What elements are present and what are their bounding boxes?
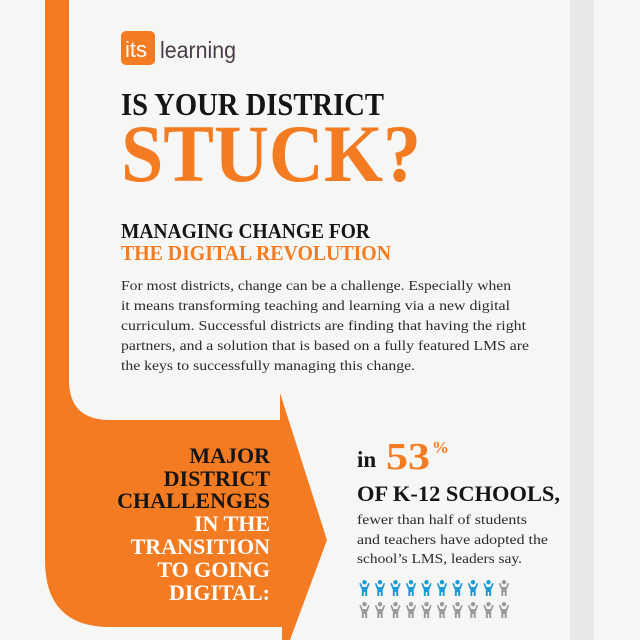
intro paragraph <box>121 279 529 374</box>
logo <box>121 31 236 65</box>
stat 53%: in <box>357 447 376 472</box>
arrow heading: CHALLENGES <box>117 488 270 513</box>
stat 53%: 53 <box>386 436 430 478</box>
orange arrow shape <box>45 0 327 640</box>
arrow heading: DISTRICT <box>164 466 270 491</box>
arrow heading: DIGITAL: <box>169 580 270 605</box>
title: STUCK? <box>121 108 421 199</box>
subtitle: MANAGING CHANGE FOR <box>121 219 371 243</box>
stat 53%: fewer than half of students <box>357 513 527 528</box>
intro paragraph: partners, and a solution that is based on a fully featured LMS are <box>121 339 529 354</box>
logo: learning <box>160 37 236 63</box>
arrow heading: TRANSITION <box>131 534 270 559</box>
arrow heading: IN THE <box>194 511 270 536</box>
intro paragraph: the keys to successfully managing this change. <box>121 359 415 374</box>
intro paragraph: it means transforming teaching and learning via a new digital <box>121 299 510 314</box>
subtitle <box>121 219 391 265</box>
gray side strip <box>570 0 594 640</box>
stat 53%: OF K-12 SCHOOLS, <box>357 481 560 506</box>
stat 53%: % <box>432 438 449 457</box>
stat 53% <box>357 436 560 567</box>
logo: its <box>125 37 147 62</box>
stat 53%: and teachers have adopted the <box>357 533 548 548</box>
people icons <box>359 580 509 618</box>
stat 53%: school’s LMS, leaders say. <box>357 552 522 567</box>
arrow heading <box>117 443 271 605</box>
title: IS YOUR DISTRICT <box>121 86 384 122</box>
arrow heading: MAJOR <box>189 443 271 468</box>
intro paragraph: curriculum. Successful districts are finding that having the right <box>121 319 526 334</box>
arrow heading: TO GOING <box>157 557 270 582</box>
subtitle: THE DIGITAL REVOLUTION <box>121 241 391 265</box>
intro paragraph: For most districts, change can be a challenge. Especially when <box>121 279 511 294</box>
